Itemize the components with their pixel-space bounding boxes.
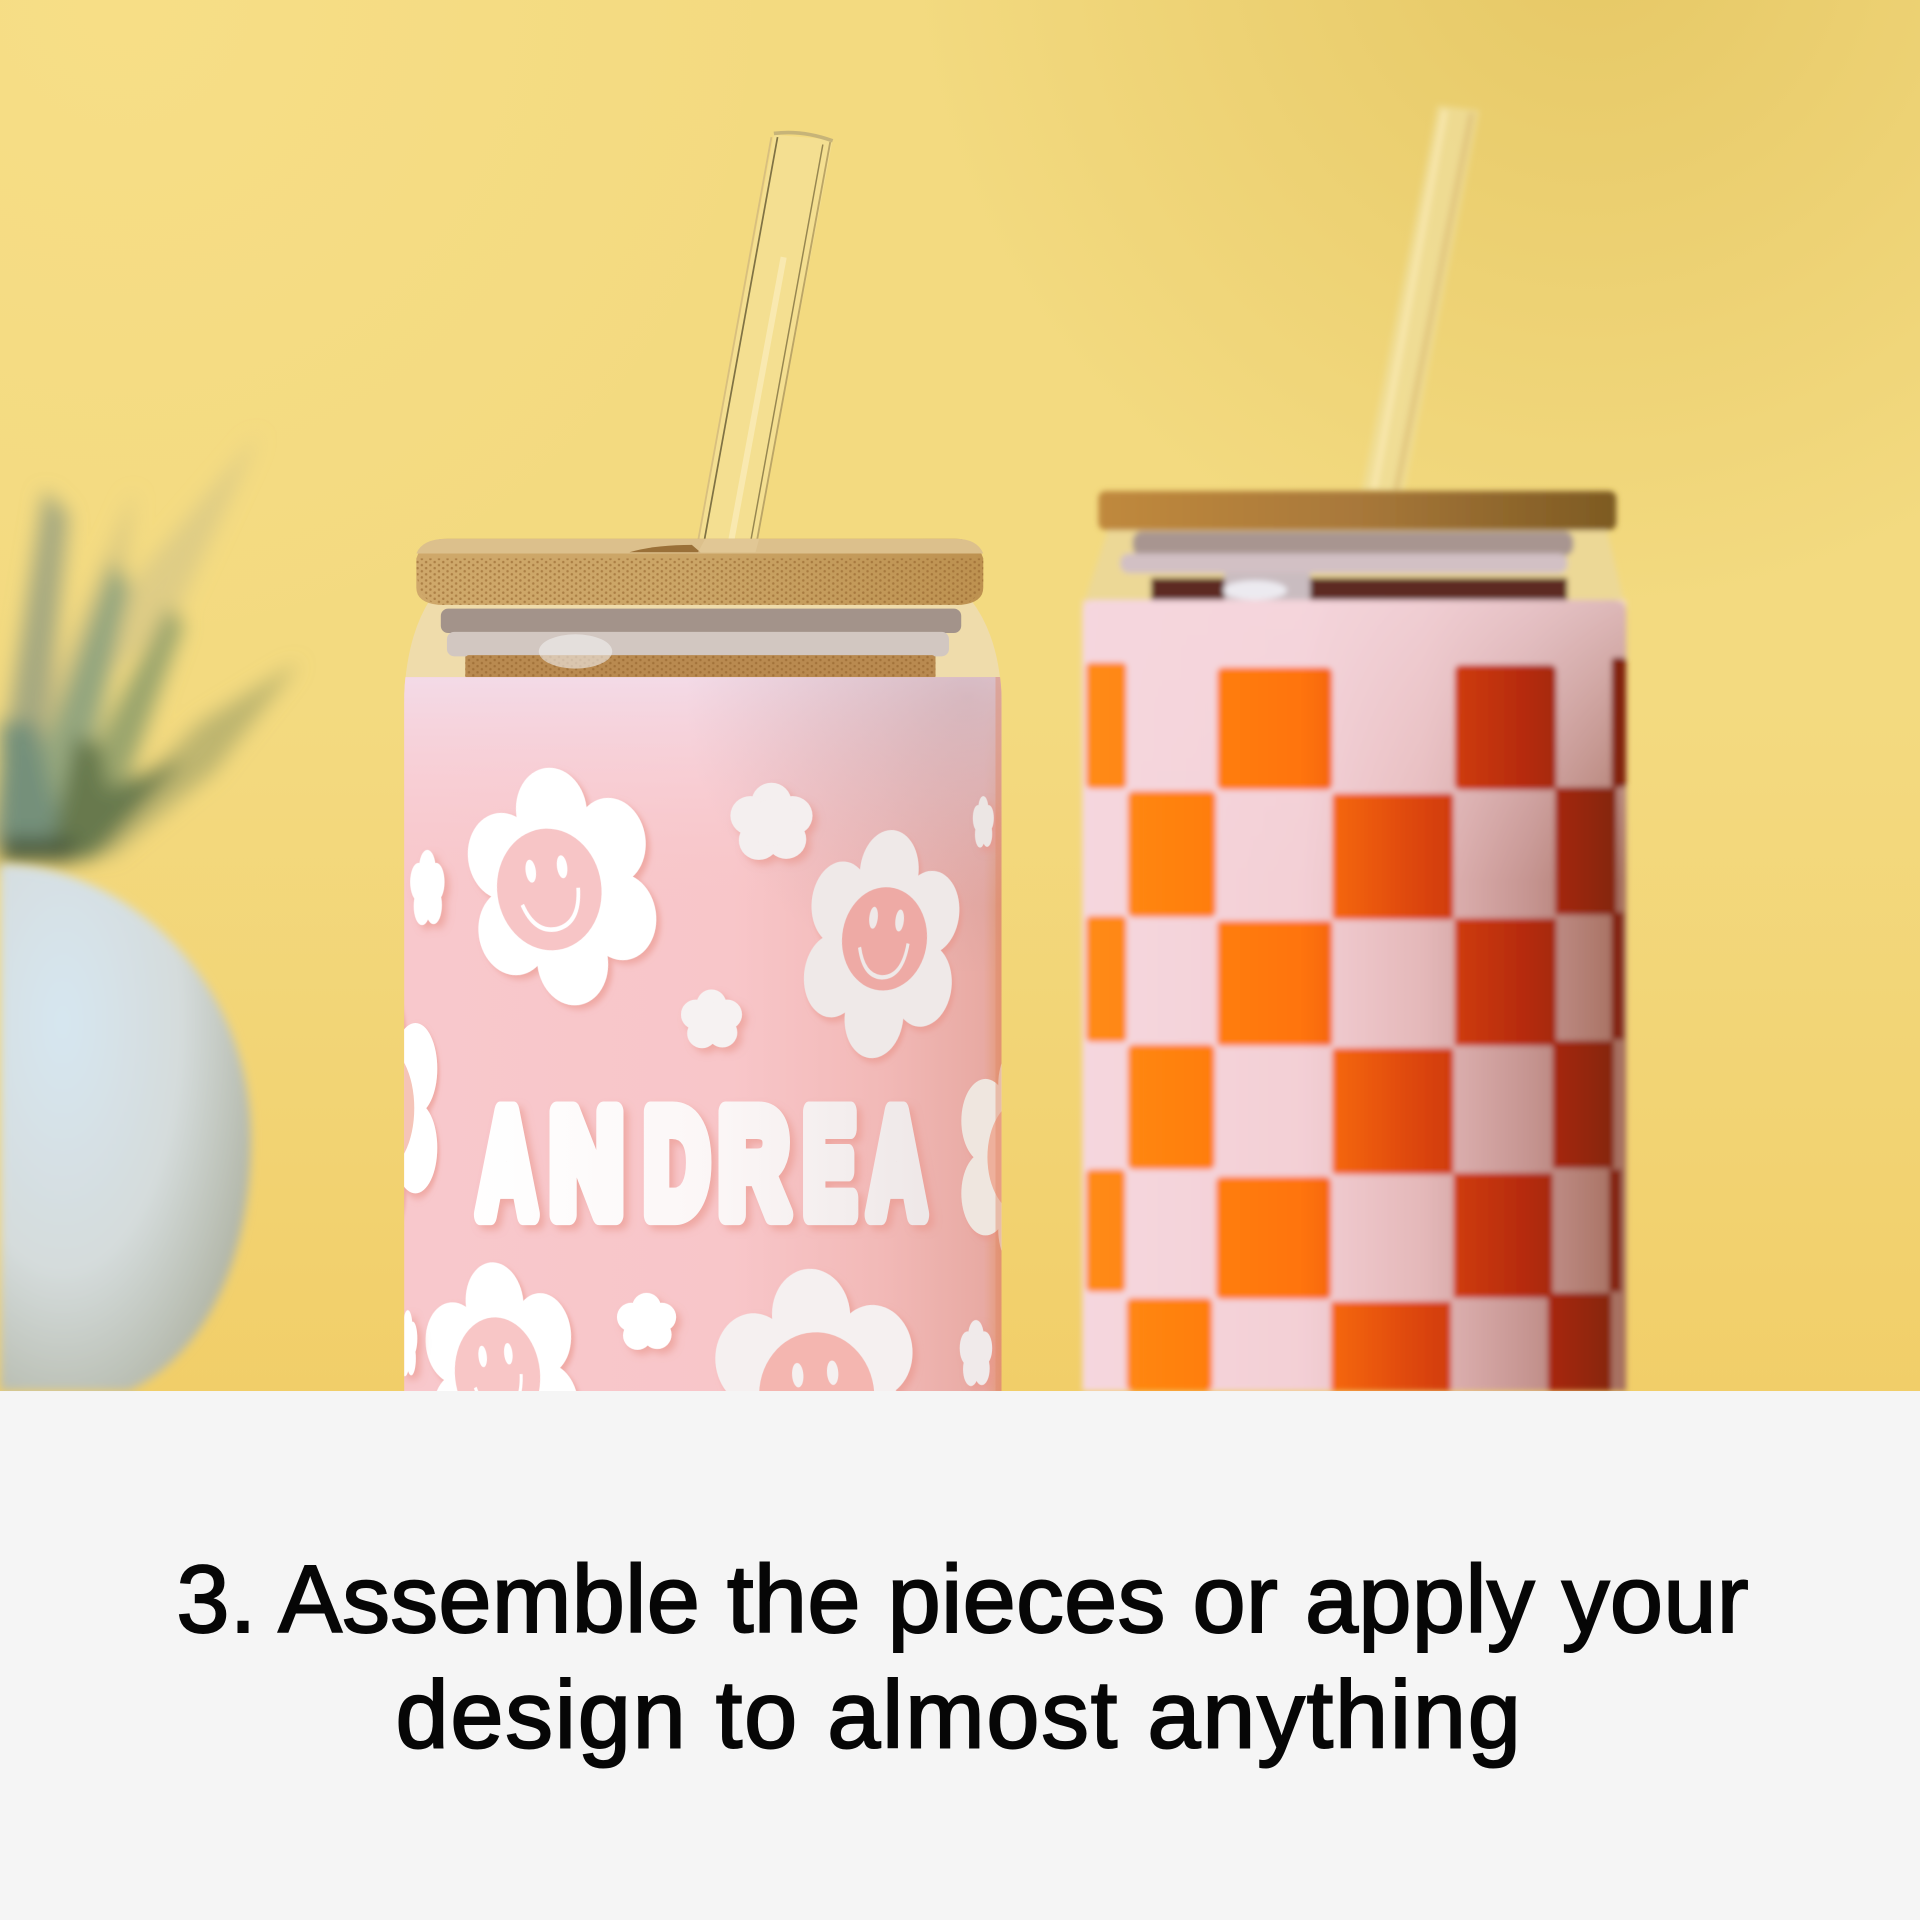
personalised name decal: R xyxy=(719,1080,789,1247)
caption panel xyxy=(0,1391,1920,1920)
front straw: clear glass xyxy=(697,133,833,549)
back cup lid xyxy=(1098,491,1616,530)
plant: blurred green leaves xyxy=(0,433,300,862)
caption line 2: design to almost anything xyxy=(396,1662,1521,1768)
caption line 1: 3. Assemble the pieces or apply your xyxy=(176,1547,1749,1653)
back cup glass rim xyxy=(1085,529,1624,600)
back cup orange squares xyxy=(1086,658,1626,1391)
back straw: glass, blurred xyxy=(1362,105,1479,495)
photo background: yellow wall xyxy=(0,0,1920,1391)
large smiley flower right xyxy=(804,830,962,1064)
caption heading xyxy=(176,1547,1749,1768)
bottom right smiley flower xyxy=(715,1268,918,1391)
personalised name decal: E xyxy=(803,1080,856,1247)
personalised name decal: A xyxy=(868,1080,926,1247)
large smiley flower top left xyxy=(468,768,662,1012)
personalised name decal: N xyxy=(550,1080,623,1247)
cut flower right edge xyxy=(961,1064,1002,1250)
front cup glass rim xyxy=(404,600,1002,698)
personalised name decal: A xyxy=(478,1080,536,1247)
vase: blurred pale blue sphere xyxy=(0,864,251,1391)
small flowers xyxy=(398,783,994,1386)
personalised name decal: D xyxy=(644,1080,709,1247)
back cup pink body xyxy=(1082,600,1626,1391)
bottom left smiley flower xyxy=(425,1262,580,1391)
back cup: orange checkerboard xyxy=(1082,491,1626,1391)
front cup pink body with decals xyxy=(404,677,1002,1391)
cut flower left edge xyxy=(404,1012,441,1215)
front cup bamboo lid xyxy=(416,539,983,605)
